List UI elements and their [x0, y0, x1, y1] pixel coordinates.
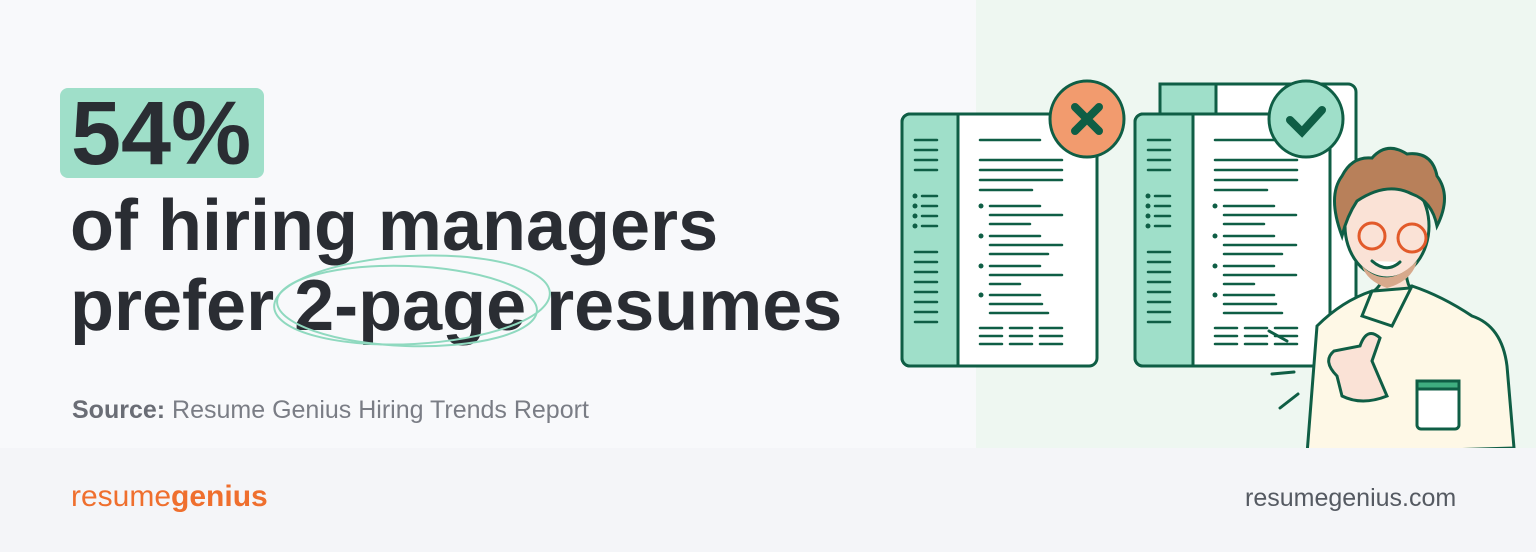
- stat highlight 54%: 54%: [71, 84, 251, 184]
- footer url: resumegenius.com: [1245, 484, 1456, 512]
- circled scribble around 2-page: [273, 254, 551, 348]
- source line: Source: Resume Genius Hiring Trends Report: [72, 396, 589, 424]
- illustration: resumes and person: [900, 80, 1516, 448]
- person: [1269, 148, 1514, 454]
- headline text: prefer 2-page resumes: [70, 266, 842, 346]
- right doc back page: [1160, 84, 1356, 364]
- headline text: [70, 186, 842, 346]
- left doc: [902, 114, 1097, 366]
- footer logo: resumegenius: [71, 480, 268, 513]
- icon: green check: [1269, 81, 1343, 157]
- headline text: of hiring managers: [70, 186, 718, 266]
- panel: right background: [976, 0, 1536, 448]
- right doc front: [1135, 114, 1330, 366]
- icon: orange x: [1050, 81, 1124, 157]
- panel: left background: [0, 0, 976, 448]
